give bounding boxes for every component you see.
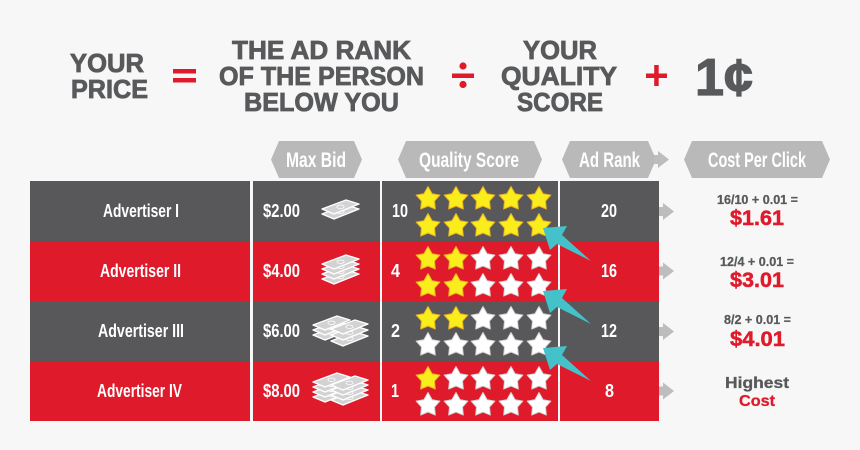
header: max bid xyxy=(271,141,362,178)
header: quality score xyxy=(398,141,542,178)
stars: advertiser III, two yellow xyxy=(416,306,551,355)
header: max bid: Max Bid xyxy=(286,149,346,172)
icon: plus sign xyxy=(646,65,667,86)
row: advertiser I xyxy=(30,181,659,241)
column headers xyxy=(271,141,830,178)
cost: highest cost: Highest xyxy=(725,375,790,392)
text: your price: PRICE xyxy=(71,74,148,104)
text: your quality score xyxy=(501,35,617,117)
row: advertiser IV xyxy=(30,361,659,421)
text: your quality score: YOUR xyxy=(523,35,597,65)
text: the ad rank of the person below you: OF THE PERSON xyxy=(219,61,424,91)
row: advertiser III: 12 xyxy=(601,320,617,341)
header: ad rank with arrow: Ad Rank xyxy=(579,149,640,172)
row: advertiser II: 16 xyxy=(601,260,617,281)
row: advertiser II xyxy=(30,241,659,301)
text: your price xyxy=(70,48,148,104)
icon: money small stack xyxy=(322,200,359,219)
cost: advertiser I xyxy=(717,193,798,230)
text: one cent: 1¢ xyxy=(695,49,753,107)
formula heading xyxy=(70,35,753,117)
row: advertiser II: $4.00 xyxy=(263,260,300,281)
arrow: teal pointer row one xyxy=(543,226,591,261)
row: advertiser IV: 1 xyxy=(391,380,399,401)
row: advertiser I: $2.00 xyxy=(263,200,300,221)
row: advertiser IV: Advertiser IV xyxy=(97,380,182,401)
cost: highest cost xyxy=(725,375,790,410)
icon: divide sign xyxy=(452,62,474,88)
text: your quality score: QUALITY xyxy=(501,61,617,91)
header: ad rank with arrow xyxy=(562,141,669,178)
header: quality score: Quality Score xyxy=(419,149,519,172)
table rows xyxy=(30,181,659,421)
text: your quality score: SCORE xyxy=(517,87,603,117)
row: advertiser III xyxy=(30,301,659,361)
row: advertiser III: 2 xyxy=(391,320,400,341)
cost: advertiser II xyxy=(720,255,794,292)
cost: advertiser I: 16/10 + 0.01 = xyxy=(717,193,798,207)
icon: money tall stack xyxy=(322,255,359,284)
text: the ad rank of the person below you: BELOW YOU xyxy=(244,87,399,117)
icon: equals sign xyxy=(173,69,196,82)
arrow: teal pointer row two xyxy=(543,289,591,324)
cost: advertiser III: 8/2 + 0.01 = xyxy=(724,313,791,327)
stars: advertiser IV, one yellow xyxy=(416,366,551,415)
row: advertiser IV: 8 xyxy=(605,380,614,401)
row: advertiser III: Advertiser III xyxy=(98,320,184,341)
cost: advertiser II: 12/4 + 0.01 = xyxy=(720,255,794,269)
header: cost per click xyxy=(684,141,830,178)
cost: advertiser II: $3.01 xyxy=(730,269,784,292)
icon: money large double stack xyxy=(313,373,368,405)
row: advertiser IV: $8.00 xyxy=(263,380,300,401)
cost: advertiser I: $1.61 xyxy=(730,207,784,230)
cost: advertiser III xyxy=(724,313,791,351)
row: advertiser II: 4 xyxy=(391,260,401,281)
row: advertiser III: $6.00 xyxy=(263,320,300,341)
stars: advertiser I, ten yellow xyxy=(416,186,551,236)
arrows: rank to cost xyxy=(659,203,674,400)
header: cost per click: Cost Per Click xyxy=(708,149,806,172)
row: advertiser I: 20 xyxy=(601,200,617,221)
row: advertiser II: Advertiser II xyxy=(100,260,181,281)
text: your price: YOUR xyxy=(70,48,144,78)
text: the ad rank of the person below you: THE AD RANK xyxy=(232,35,411,65)
icon: money double stack xyxy=(313,316,368,346)
row: advertiser I: Advertiser I xyxy=(103,200,179,221)
arrow: teal pointer row three xyxy=(543,346,591,381)
text: the ad rank of the person below you xyxy=(219,35,424,117)
row: advertiser I: 10 xyxy=(392,200,408,221)
cost: advertiser III: $4.01 xyxy=(730,328,785,351)
stars: advertiser II, four yellow xyxy=(416,246,551,296)
cost: highest cost: Cost xyxy=(739,393,776,410)
